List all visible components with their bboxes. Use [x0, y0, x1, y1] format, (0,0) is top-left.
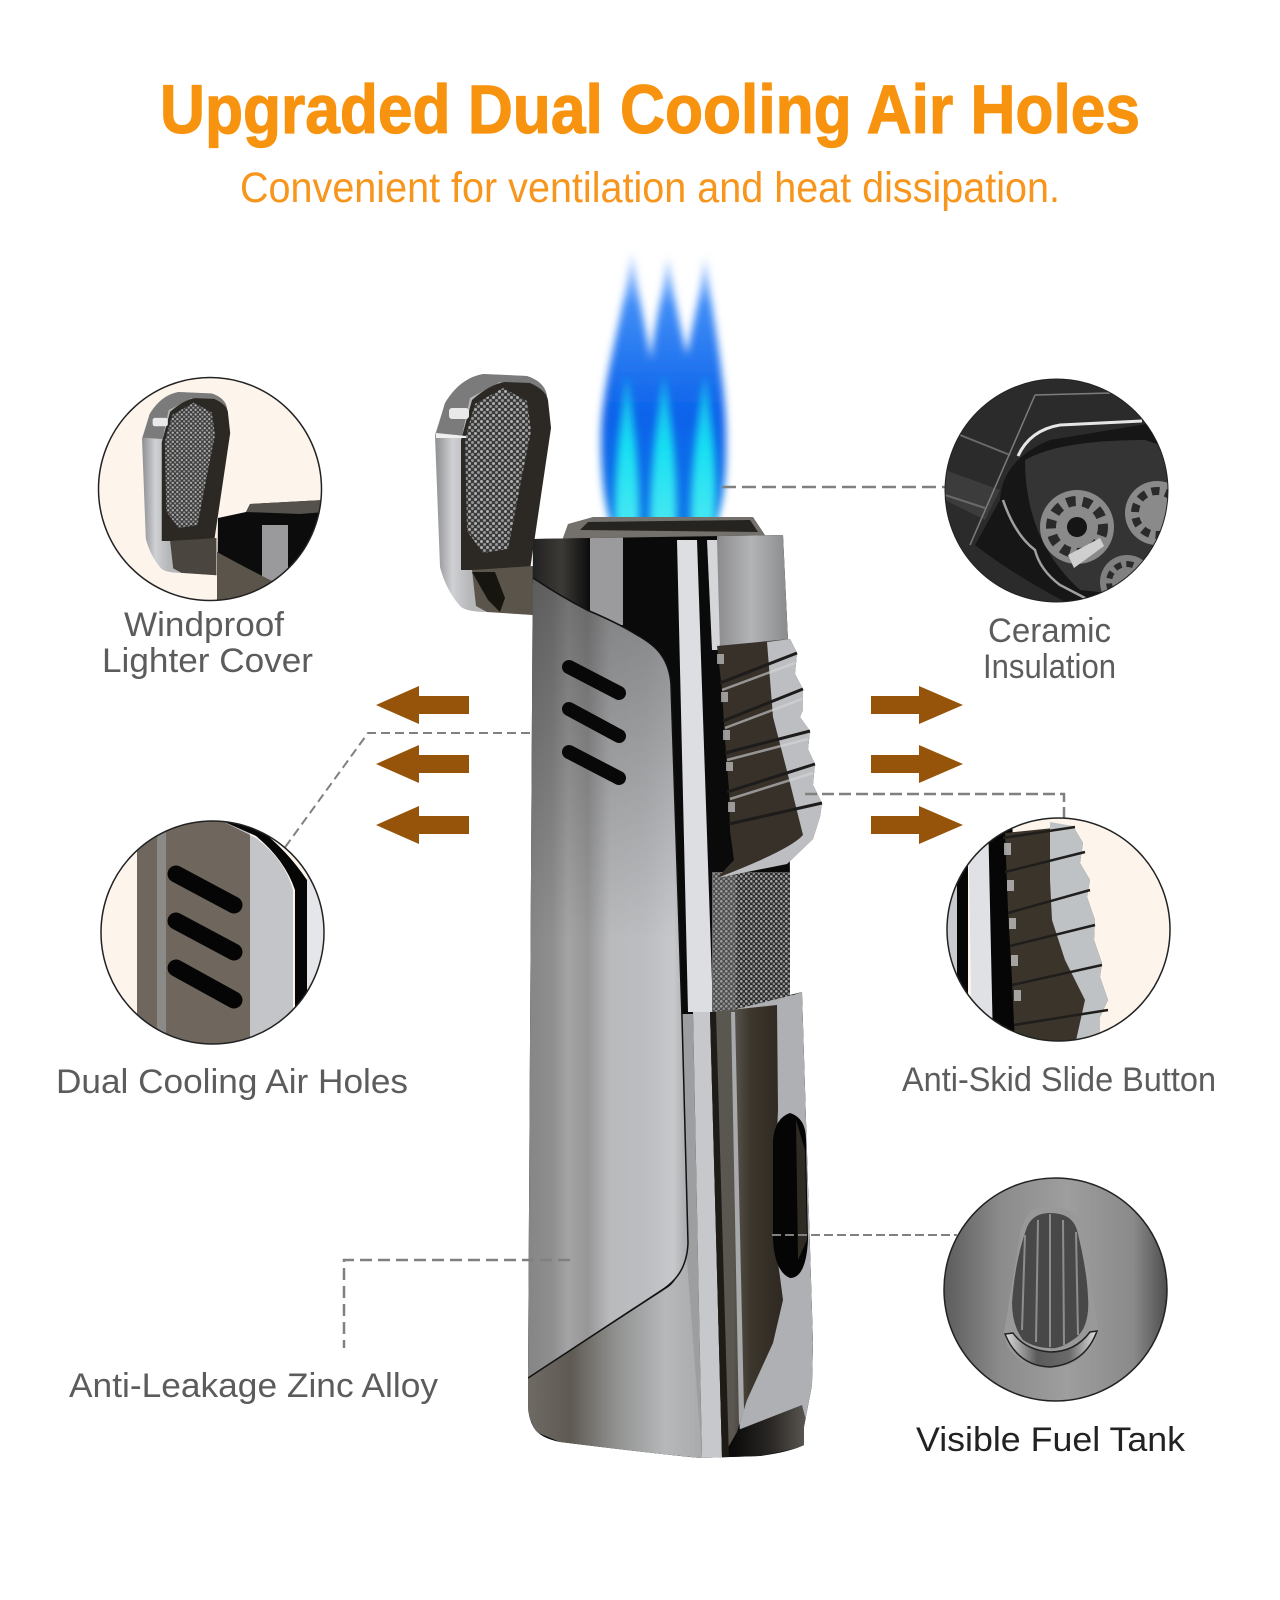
label: windproof cover: Windproof	[124, 606, 285, 644]
label: visible fuel tank: Visible Fuel Tank	[916, 1421, 1186, 1459]
callout circle: ceramic insulation	[944, 378, 1168, 602]
lighter	[435, 374, 822, 1460]
label: anti-skid slide button: Anti-Skid Slide Button	[902, 1061, 1216, 1099]
dashed line: fuel tank	[772, 1234, 957, 1236]
label: anti-leakage zinc alloy: Anti-Leakage Zinc Alloy	[69, 1367, 438, 1405]
label: dual cooling air holes: Dual Cooling Air Holes	[56, 1063, 408, 1101]
dashed line: slide button	[805, 794, 1064, 878]
anti-skid slide button	[717, 639, 822, 878]
dashed line: dual cooling air holes	[270, 733, 530, 868]
lower side strips	[682, 992, 813, 1458]
label: ceramic insulation	[983, 612, 1116, 686]
callout circle: dual cooling air holes	[100, 816, 327, 1050]
label: ceramic insulation: Ceramic	[988, 612, 1111, 650]
cooling air slots	[569, 667, 619, 778]
title: Upgraded Dual Cooling Air Holes	[160, 71, 1140, 148]
label: windproof cover: Lighter Cover	[102, 642, 313, 680]
foot	[728, 1405, 806, 1458]
lighter body	[525, 530, 815, 1460]
icon: triple blue flames	[601, 252, 726, 530]
lower wedge	[526, 1250, 702, 1458]
lighter cover	[435, 374, 551, 615]
arrows: left airflow	[376, 686, 469, 844]
callout circle: windproof cover	[95, 375, 325, 610]
brushed main panel	[525, 578, 688, 1378]
callout circle: visible fuel tank	[940, 1175, 1170, 1405]
label: windproof cover	[102, 606, 313, 680]
callout circle: anti-skid slide button	[945, 815, 1173, 1045]
label: ceramic insulation: Insulation	[983, 648, 1116, 686]
knurled grip	[712, 872, 792, 1014]
dashed line: zinc alloy	[344, 1260, 570, 1348]
fuel window	[773, 1113, 808, 1278]
subtitle: Convenient for ventilation and heat dissipation.	[240, 164, 1060, 212]
dashed line: ceramic insulation	[722, 486, 945, 488]
burner ring	[560, 517, 770, 546]
arrows: right airflow	[871, 686, 963, 844]
